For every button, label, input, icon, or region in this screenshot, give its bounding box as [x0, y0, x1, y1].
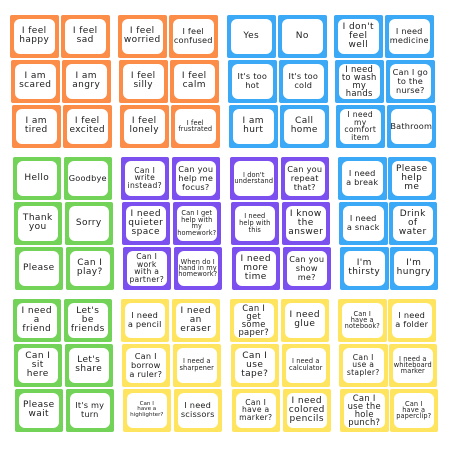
card: I need to wash my hands: to wash [342, 72, 377, 82]
card: I don't feel well: well [348, 40, 368, 50]
panel: supplies cards 1 [121, 299, 222, 432]
card: I feel frustrated: frustrated [178, 125, 212, 133]
panel: classroom help cards 1 [121, 157, 222, 290]
card: Let's be friends: be [82, 315, 94, 325]
card: I am scared: scared [19, 80, 51, 90]
card: I am angry [62, 60, 110, 102]
card: I need a sharpener [172, 344, 221, 386]
card: I am tired [12, 105, 60, 148]
card: Can I have a notebook?: have a [351, 316, 374, 324]
card: Thank you [14, 202, 62, 244]
card: I need my comfort item: comfort [344, 125, 376, 134]
card: I need an eraser: I need [181, 306, 211, 316]
card: I feel frustrated [171, 105, 220, 148]
card: I need a folder: a folder [395, 319, 428, 329]
card: Can I go to the nurse?: nurse? [396, 85, 425, 95]
card: Can I work with a partner?: work [137, 260, 157, 269]
card: Can you show me?: me? [298, 272, 316, 282]
card: Can I sit here: here [27, 369, 49, 379]
panel: needs cards 2 [334, 15, 436, 148]
card: I need a friend: friend [22, 324, 51, 334]
card: Can I use the hole punch? [340, 389, 388, 432]
card: I feel sad [61, 15, 110, 58]
card: Let's share [64, 344, 113, 386]
card: Can you repeat that?: that? [294, 182, 316, 192]
card: Can I use a stapler?: Can I [353, 353, 374, 362]
card: Drink of water: water [399, 227, 427, 237]
card: Can I sit here: sit [32, 360, 44, 370]
card: I'm hungry: hungry [397, 267, 431, 277]
card: I feel excited: I feel [75, 116, 100, 126]
card: I need a whiteboard marker: marker [401, 367, 425, 375]
card: I need my comfort item [336, 105, 384, 148]
card: I am tired: I am [26, 116, 47, 126]
card: Please help me: help [401, 173, 422, 183]
card: Can I use the hole punch?: use the [348, 401, 381, 411]
card: Please wait: Please [23, 400, 55, 410]
card: Hello: Hello [24, 173, 49, 183]
card: Can I sit here [14, 344, 62, 386]
card: No [278, 15, 326, 58]
card: No: No [296, 31, 309, 41]
card: Can you show me?: Can you [289, 254, 324, 264]
card: Can I use a stapler?: use a [352, 360, 374, 369]
card: Can I have a marker?: marker? [239, 413, 272, 422]
card: Can I work with a partner?: Can I [136, 252, 157, 261]
card: Can I have a paperclip? [390, 389, 438, 432]
card: I need quieter space: space [132, 227, 160, 237]
card: Please wait: wait [28, 409, 49, 419]
card: Can I use a stapler?: stapler? [347, 368, 380, 377]
card: I need to wash my hands: hands [346, 88, 373, 98]
card: Can I get some paper?: paper? [238, 327, 269, 337]
card: I need help with this [230, 202, 279, 244]
card: I am scared: I am [25, 71, 46, 81]
card: Can I get help with my homework?: my [191, 222, 202, 230]
card: Can I get help with my homework?: Can I get [181, 209, 212, 217]
card: Bathroom [387, 105, 436, 148]
card: Can I use tape?: Can I [242, 351, 267, 361]
card: Yes [227, 15, 276, 58]
card: I need glue [280, 299, 329, 342]
card: I don't feel well: feel [349, 31, 367, 41]
card: I need a sharpener: sharpener [180, 364, 214, 372]
card: I need help with this: this [249, 226, 261, 234]
card: I feel calm [170, 60, 218, 102]
card: I need medicine [385, 15, 434, 58]
card: Let's be friends: friends [71, 324, 105, 334]
card: I feel lonely: lonely [130, 125, 159, 135]
card: Goodbye: Goodbye [69, 173, 107, 183]
card: I feel silly: silly [133, 80, 153, 90]
card: When do I hand in my homework?: When do I [181, 258, 215, 266]
card: It's my turn: It's my [75, 400, 104, 410]
card: I need a sharpener: I need a [183, 357, 210, 365]
card: I need a snack [339, 202, 388, 244]
card: Can I get some paper? [230, 299, 278, 342]
card: It's too hot [228, 60, 276, 102]
card: Can I sit here: Can I [25, 351, 50, 361]
card: I need a calculator: calculator [289, 364, 322, 372]
card: Thank you: Thank [23, 213, 53, 223]
card: Can I have a marker? [232, 389, 280, 432]
card: I'm thirsty: thirsty [348, 267, 380, 277]
card: Can I work with a partner?: with a [134, 267, 159, 276]
card: I need more time [232, 247, 280, 290]
card: I need more time: more [243, 263, 268, 273]
card: I need medicine: I need [396, 26, 423, 36]
card: I feel worried [118, 15, 166, 58]
card: I need quieter space: quieter [128, 218, 163, 228]
card: I need scissors: scissors [181, 409, 215, 419]
card: Please help me [388, 157, 436, 200]
card: It's my turn: turn [81, 409, 99, 419]
card: Can I play?: play? [77, 267, 103, 277]
card: I need a whiteboard marker: I need a [399, 355, 426, 363]
card: Can you show me?: show [296, 263, 318, 273]
card: I need a whiteboard marker [388, 344, 437, 386]
card: I need an eraser [172, 299, 220, 342]
card: Can I use tape? [230, 344, 279, 386]
card: Let's be friends [64, 299, 112, 342]
card: I need help with this: I need [244, 212, 265, 220]
card: Can I have a highlighter?: Can I [140, 401, 154, 407]
panel: feelings cards 1 [10, 15, 112, 148]
card: Can I have a paperclip?: paperclip? [396, 412, 431, 420]
card: I need a snack: a snack [347, 222, 380, 232]
card: I feel sad: sad [77, 35, 94, 45]
card: I need an eraser: an [190, 315, 202, 325]
card: Can I get help with my homework? [172, 202, 221, 244]
card: I need to wash my hands: my [352, 80, 366, 90]
card: I feel silly [119, 60, 168, 102]
card: Can I have a paperclip?: Can I [405, 400, 422, 408]
card: Can I play?: Can I [77, 258, 102, 268]
card: I am hurt [229, 105, 278, 148]
card: Can I use tape?: tape? [241, 369, 268, 379]
card: Can I have a highlighter?: highlighter? [130, 412, 163, 418]
card: I need a friend: I need [22, 306, 52, 316]
card: I am scared [11, 60, 60, 102]
card: Can I write instead? [120, 157, 169, 200]
card: I need medicine: medicine [390, 35, 429, 45]
card: Can I go to the nurse?: Can I go [393, 67, 428, 77]
card: It's too hot: It's too [237, 71, 267, 81]
card: Please: Please [23, 263, 55, 273]
card: Can I have a notebook?: Can I [354, 310, 371, 318]
card: I know the answer: I know [290, 209, 322, 219]
card: I need colored pencils: I need [292, 396, 322, 406]
card: Let's share: share [75, 364, 102, 374]
card: Can I borrow a ruler? [122, 344, 170, 386]
card: Can you help me focus?: help me [178, 173, 213, 183]
card: I need help with this: help with [239, 219, 270, 227]
card: I need my comfort item: my [354, 118, 366, 127]
card: Drink of water: Drink [400, 209, 426, 219]
card: I need glue: glue [294, 319, 315, 329]
card: Drink of water: of [408, 218, 417, 228]
panel: social cards 2 [13, 299, 114, 432]
card: I need a friend [12, 299, 61, 342]
card: I need a snack: I need [350, 213, 377, 223]
card: I don't feel well: I don't [343, 22, 374, 32]
card: I'm thirsty [340, 247, 388, 290]
panel: break and snack cards [338, 157, 438, 290]
card: I don't understand: I don't [243, 171, 265, 179]
card: Call home: home [291, 125, 318, 135]
card: I need quieter space [122, 202, 170, 244]
card: Can I use tape?: use [246, 360, 263, 370]
card: I need a folder: I need [398, 310, 425, 320]
card: I need more time: time [245, 272, 267, 282]
card: I feel excited [63, 105, 112, 148]
card: I need a break: I need [349, 168, 376, 178]
card: Can I work with a partner?: partner? [129, 275, 164, 284]
card: Sorry [64, 202, 113, 244]
card: I feel silly: I feel [131, 71, 156, 81]
card: I need scissors: I need [184, 400, 211, 410]
card: Sorry: Sorry [76, 218, 102, 228]
card: I feel confused [169, 15, 218, 58]
card: Can I have a notebook?: notebook? [345, 322, 380, 330]
card: I know the answer: the [298, 218, 314, 228]
card: Can I use a stapler? [339, 344, 388, 386]
card: I need a calculator [282, 344, 330, 386]
card: I am hurt: hurt [243, 125, 263, 135]
card: I need more time: I need [241, 254, 271, 264]
card: I need to wash my hands: I need [345, 64, 373, 74]
card: I need a break: a break [346, 177, 378, 187]
card: Please [14, 247, 63, 290]
card: Hello [12, 157, 61, 200]
card: Can I get some paper?: get [246, 311, 261, 321]
card: I feel calm: I feel [182, 71, 207, 81]
card: Let's be friends: Let's [76, 306, 99, 316]
card: It's my turn [66, 389, 114, 432]
card: Can I borrow a ruler?: borrow [131, 360, 161, 370]
card: I'm thirsty: I'm [357, 258, 372, 268]
panel: classroom help cards 2 [230, 157, 331, 290]
card: It's too hot: hot [245, 80, 259, 90]
card: I need colored pencils: colored [289, 405, 325, 415]
card: Can I get help with my homework?: homework? [177, 229, 216, 237]
panel: feelings cards 2 [118, 15, 220, 148]
card: I need an eraser: eraser [180, 324, 211, 334]
card: Call home [280, 105, 328, 148]
card: Can I get help with my homework?: help with [181, 216, 212, 224]
card: I need glue: I need [290, 310, 320, 320]
card: Can I have a marker?: Can I [245, 398, 266, 407]
card: I feel calm: calm [183, 80, 206, 90]
card: I need to wash my hands [335, 60, 384, 102]
card: Can I have a highlighter? [122, 389, 171, 432]
card: I need a calculator: I need a [292, 357, 319, 365]
card: When do I hand in my homework?: homework? [178, 270, 217, 278]
card: I am hurt: I am [243, 116, 264, 126]
panel: supplies cards 3 [338, 299, 438, 432]
card: I need a break [338, 157, 386, 200]
card: It's too cold: cold [294, 80, 312, 90]
card: I need a pencil [120, 299, 169, 342]
card: Can I get some paper?: some [242, 319, 266, 329]
card: Drink of water [388, 202, 437, 244]
card: I'm hungry [390, 247, 438, 290]
card: I need colored pencils [282, 389, 331, 432]
card: I need quieter space: I need [131, 209, 161, 219]
card: Can I write instead?: Can I [134, 166, 155, 175]
card: Can you help me focus?: Can you [178, 164, 213, 174]
card: Can I have a notebook? [338, 299, 386, 342]
card: Can I borrow a ruler?: a ruler? [129, 369, 162, 379]
card: I am tired: tired [25, 125, 48, 135]
card: I know the answer [282, 202, 330, 244]
card: I am angry: I am [76, 71, 97, 81]
panel: supplies cards 2 [230, 299, 331, 432]
card: Can I work with a partner? [122, 247, 171, 290]
card: Can I have a highlighter?: have a [137, 406, 156, 412]
card: It's too cold [279, 60, 328, 102]
card: I need a whiteboard marker: whiteboard [394, 361, 432, 369]
card: Yes: Yes [243, 31, 259, 41]
card: Can you help me focus?: focus? [182, 182, 209, 192]
card: I feel lonely: I feel [132, 116, 157, 126]
card: Let's share: Let's [77, 355, 100, 365]
card: I need scissors [174, 389, 222, 432]
panel: social cards 1 [13, 157, 114, 290]
card: Can I use the hole punch?: Can I [353, 393, 376, 403]
card: I know the answer: answer [288, 227, 323, 237]
card: Please wait [14, 389, 63, 432]
card: I feel confused: confused [174, 35, 213, 45]
card: When do I hand in my homework?: hand in my [179, 264, 217, 272]
card: I feel excited: excited [69, 125, 105, 135]
card: Call home: Call [295, 116, 313, 126]
card: I need a friend: a [34, 315, 40, 325]
card: Can you repeat that? [280, 157, 329, 200]
card: I am angry: angry [72, 80, 100, 90]
card: Can I have a paperclip?: have a [402, 406, 425, 414]
card: I'm hungry: I'm [406, 258, 421, 268]
card: I don't understand [230, 157, 278, 200]
card: I feel happy: I feel [22, 26, 47, 36]
card: Can you repeat that?: repeat [291, 173, 319, 183]
card: I feel lonely [120, 105, 168, 148]
card: Can you repeat that?: Can you [287, 164, 322, 174]
card: I feel sad: I feel [73, 26, 98, 36]
card: Thank you: you [29, 222, 47, 232]
card: Can I have a marker?: have a [242, 405, 269, 414]
card: I need my comfort item: I need [348, 110, 373, 119]
card: I need my comfort item: item [351, 133, 369, 142]
card: Can you help me focus? [172, 157, 220, 200]
card: Goodbye [64, 157, 112, 200]
card: I need colored pencils: pencils [290, 414, 324, 424]
card: I need a folder [388, 299, 436, 342]
card: I feel happy: happy [19, 35, 49, 45]
card: I feel happy [10, 15, 58, 58]
card: I feel worried: I feel [130, 26, 155, 36]
card: I feel worried: worried [124, 35, 161, 45]
card: Can I go to the nurse?: to the [398, 76, 423, 86]
card: I feel confused: I feel [183, 26, 204, 36]
card: Please help me: Please [396, 164, 428, 174]
card: It's too cold: It's too [288, 71, 318, 81]
card: Can I use the hole punch?: punch? [348, 417, 380, 427]
card: I feel frustrated: I feel [187, 119, 204, 127]
card: Can I write instead?: instead? [128, 181, 162, 190]
card: I don't feel well [334, 15, 382, 58]
card: Can I use the hole punch?: hole [355, 409, 374, 419]
card: I need a pencil: I need [131, 310, 158, 320]
card: Can I get some paper?: Can I [242, 303, 265, 313]
card: Can you show me? [282, 247, 331, 290]
card: I need a pencil: a pencil [128, 319, 162, 329]
card: Can I play? [66, 247, 114, 290]
card: Please help me: me [404, 182, 419, 192]
card: Can I write instead?: write [134, 173, 155, 182]
card: Can I go to the nurse? [386, 60, 434, 102]
card: Can I borrow a ruler?: Can I [135, 351, 157, 361]
card: When do I hand in my homework? [174, 247, 222, 290]
card: I don't understand: understand [234, 177, 273, 185]
panel: needs cards 1 [227, 15, 329, 148]
card: Bathroom: Bathroom [390, 121, 432, 131]
